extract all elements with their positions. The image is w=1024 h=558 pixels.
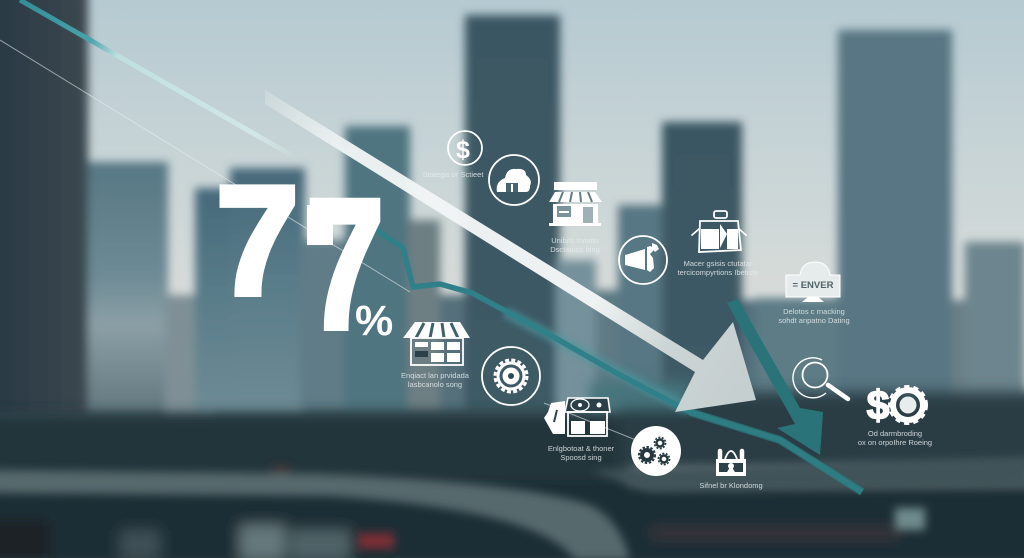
big stat: 77%: 7 (216, 154, 299, 328)
icon: lock bag (716, 451, 746, 476)
caption: lock bag: Sifnel br Klondomg (699, 481, 763, 490)
icon: gear circle (482, 347, 540, 405)
faded teal line top left (20, 0, 300, 160)
icon: monitor ENVER (786, 262, 840, 302)
caption: store left: lasbcanolo song (408, 380, 462, 389)
icon: box with arrow (692, 211, 746, 252)
icon: dollar circle (448, 131, 482, 165)
big stat: 77%: 7 (306, 160, 384, 367)
icon: storefront top (549, 182, 602, 226)
icon: megaphone circle (619, 236, 667, 284)
icon: dollar circle: $ (456, 136, 470, 164)
icon: store with awning left (403, 322, 470, 365)
icon: monitor ENVER: = ENVER (793, 280, 834, 291)
caption: dollar: Stategis or Sctieet (423, 170, 484, 179)
caption: store left: Enqiact lan prvidada (401, 371, 470, 380)
icon: magnifier (793, 358, 848, 399)
icon: dollar and gear: $ (867, 382, 890, 428)
caption: storefront top: Dsctatoos bing (550, 245, 600, 254)
caption: monitor: sohdt anpatno Dating (778, 316, 850, 325)
icon: shop with tag (544, 398, 610, 436)
caption: box: tercicompyrtions Ibetiste (678, 268, 758, 277)
big stat: 77%: % (355, 297, 393, 345)
caption: storefront top: Unibits Irviatto (551, 236, 599, 245)
teal declining trend line (347, 210, 862, 492)
large teal arrow (727, 299, 823, 455)
icon: gears on white circle (631, 426, 681, 476)
caption: dollar and gear: Od darmbroding (868, 429, 922, 438)
icon: cloud house circle (489, 155, 539, 205)
large white declining arrow (265, 90, 756, 412)
caption: shop with tag: Spoosd sing (560, 453, 602, 462)
caption: shop with tag: Enlgbotoat & thoner (548, 444, 615, 453)
caption: box: Macer gsisis ctutatar (684, 259, 753, 268)
big stat: 77% (216, 154, 393, 367)
caption: monitor: Delotos c rnacking (783, 307, 845, 316)
icon: dollar and gear (867, 382, 926, 428)
caption: dollar and gear: ox on orpoIhre Roeing (858, 438, 932, 447)
thin white diagonal trend line (0, 40, 636, 440)
